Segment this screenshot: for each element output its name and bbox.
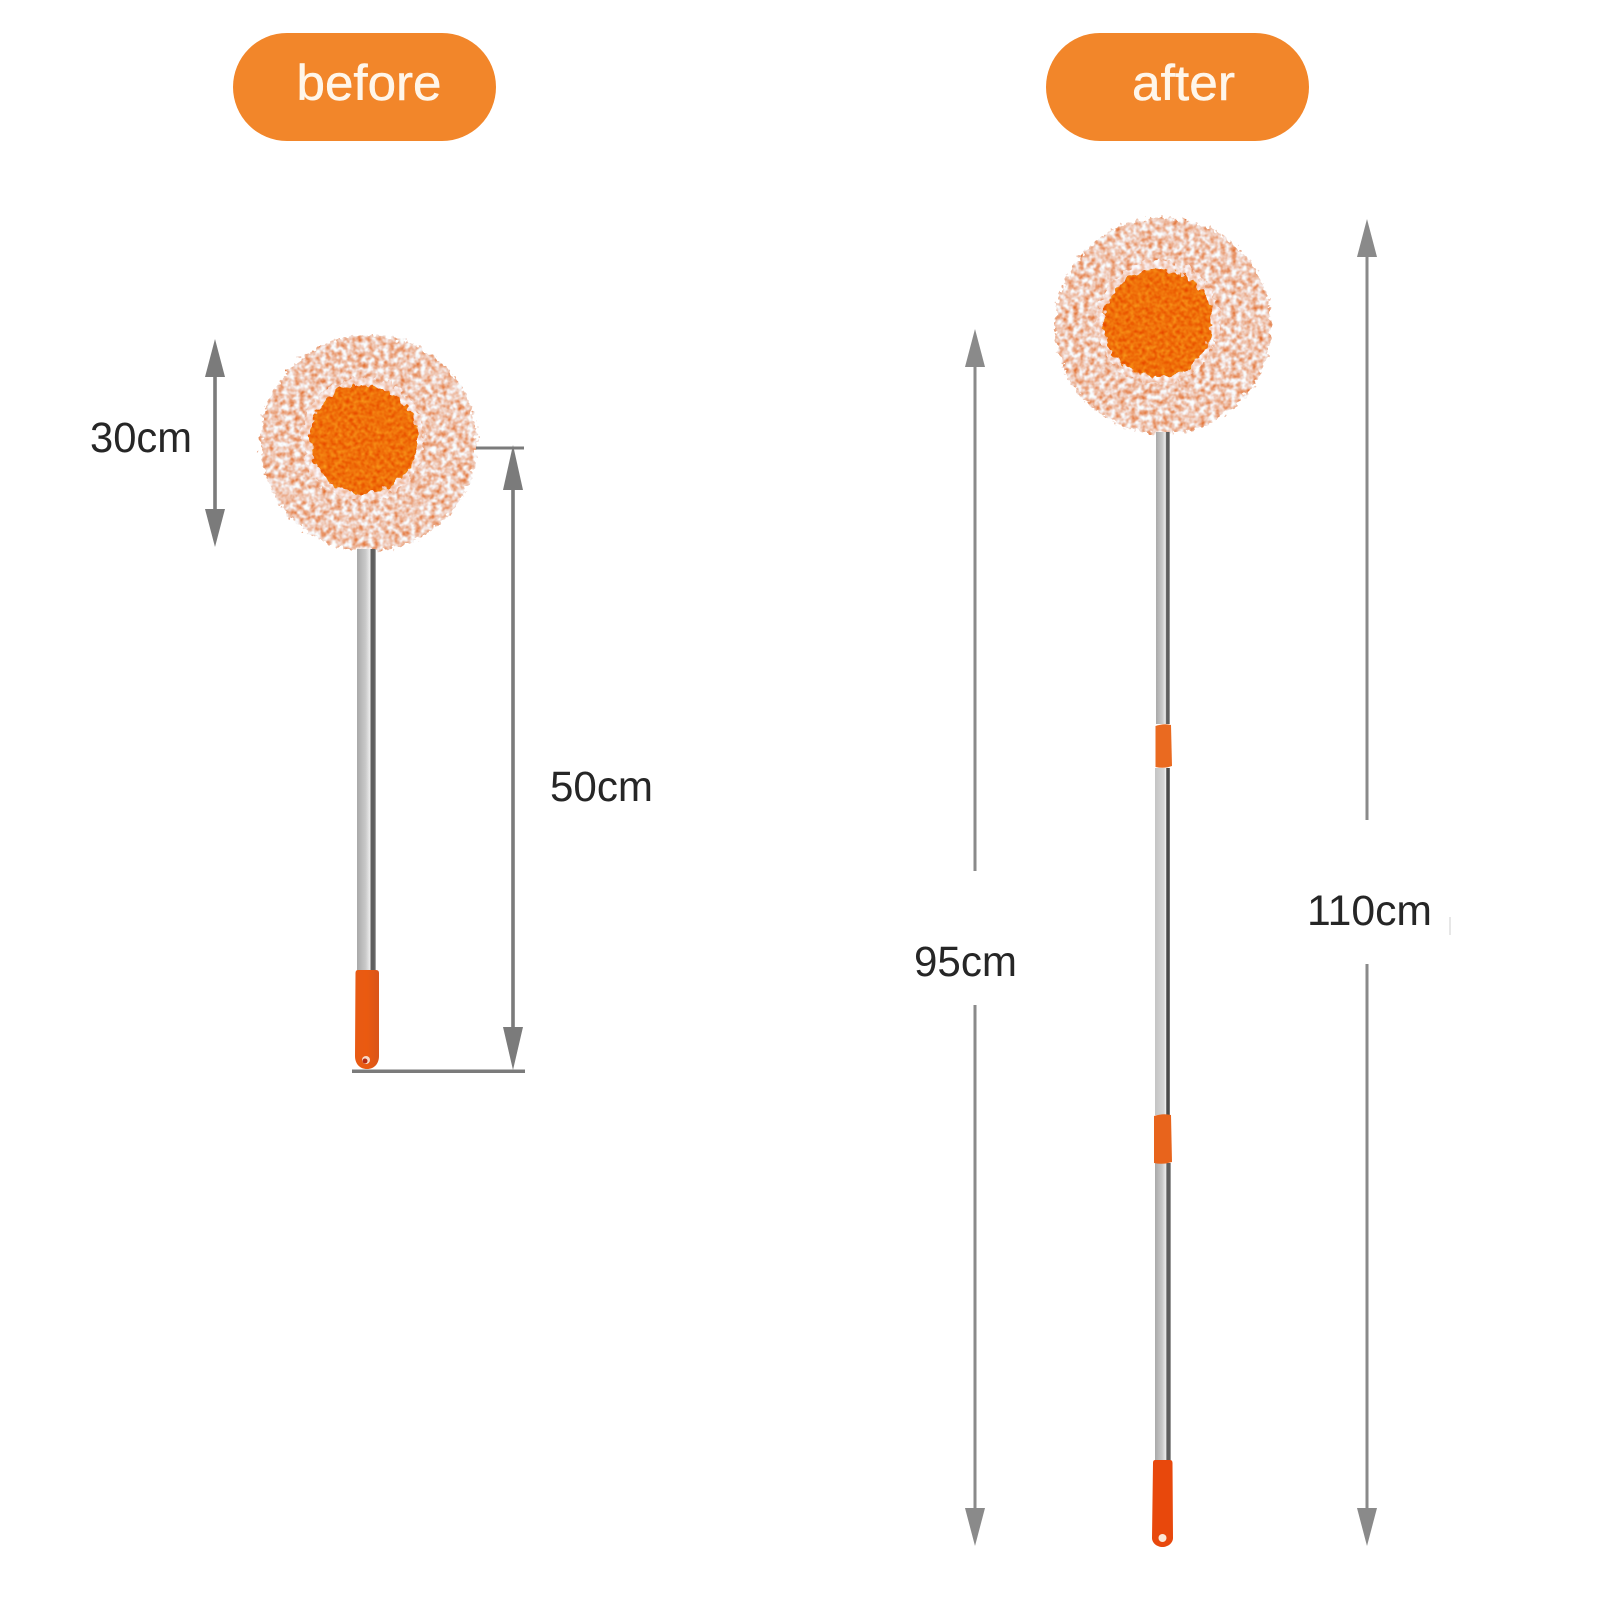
upper orange collar — [1156, 724, 1172, 768]
mop head: before — [260, 335, 476, 551]
dimension arrow: 95cm — [965, 329, 985, 1546]
handle grip with hanging hole — [1152, 1460, 1173, 1547]
after badge: after — [1132, 55, 1235, 111]
label: 50cm: 50cm — [550, 763, 653, 811]
after badge — [1046, 33, 1309, 141]
label: 95cm: 95cm — [914, 938, 1017, 986]
label: 30cm: 30cm — [90, 414, 192, 462]
panel: before — [90, 33, 653, 1073]
short telescopic handle — [355, 549, 379, 1069]
label: 110cm: 110cm — [1307, 887, 1432, 935]
before badge: before — [296, 55, 442, 111]
mop head: after — [1055, 218, 1271, 434]
before badge — [233, 33, 496, 141]
handle grip with hanging hole — [355, 970, 379, 1069]
extended telescopic handle — [1152, 432, 1173, 1547]
lower orange collar — [1154, 1114, 1172, 1164]
dimension arrow: 110cm — [1357, 219, 1377, 1546]
dimension arrow: 30cm mop head — [205, 339, 225, 547]
dimension: 50cm handle length — [352, 445, 525, 1073]
panel: after — [914, 33, 1450, 1547]
